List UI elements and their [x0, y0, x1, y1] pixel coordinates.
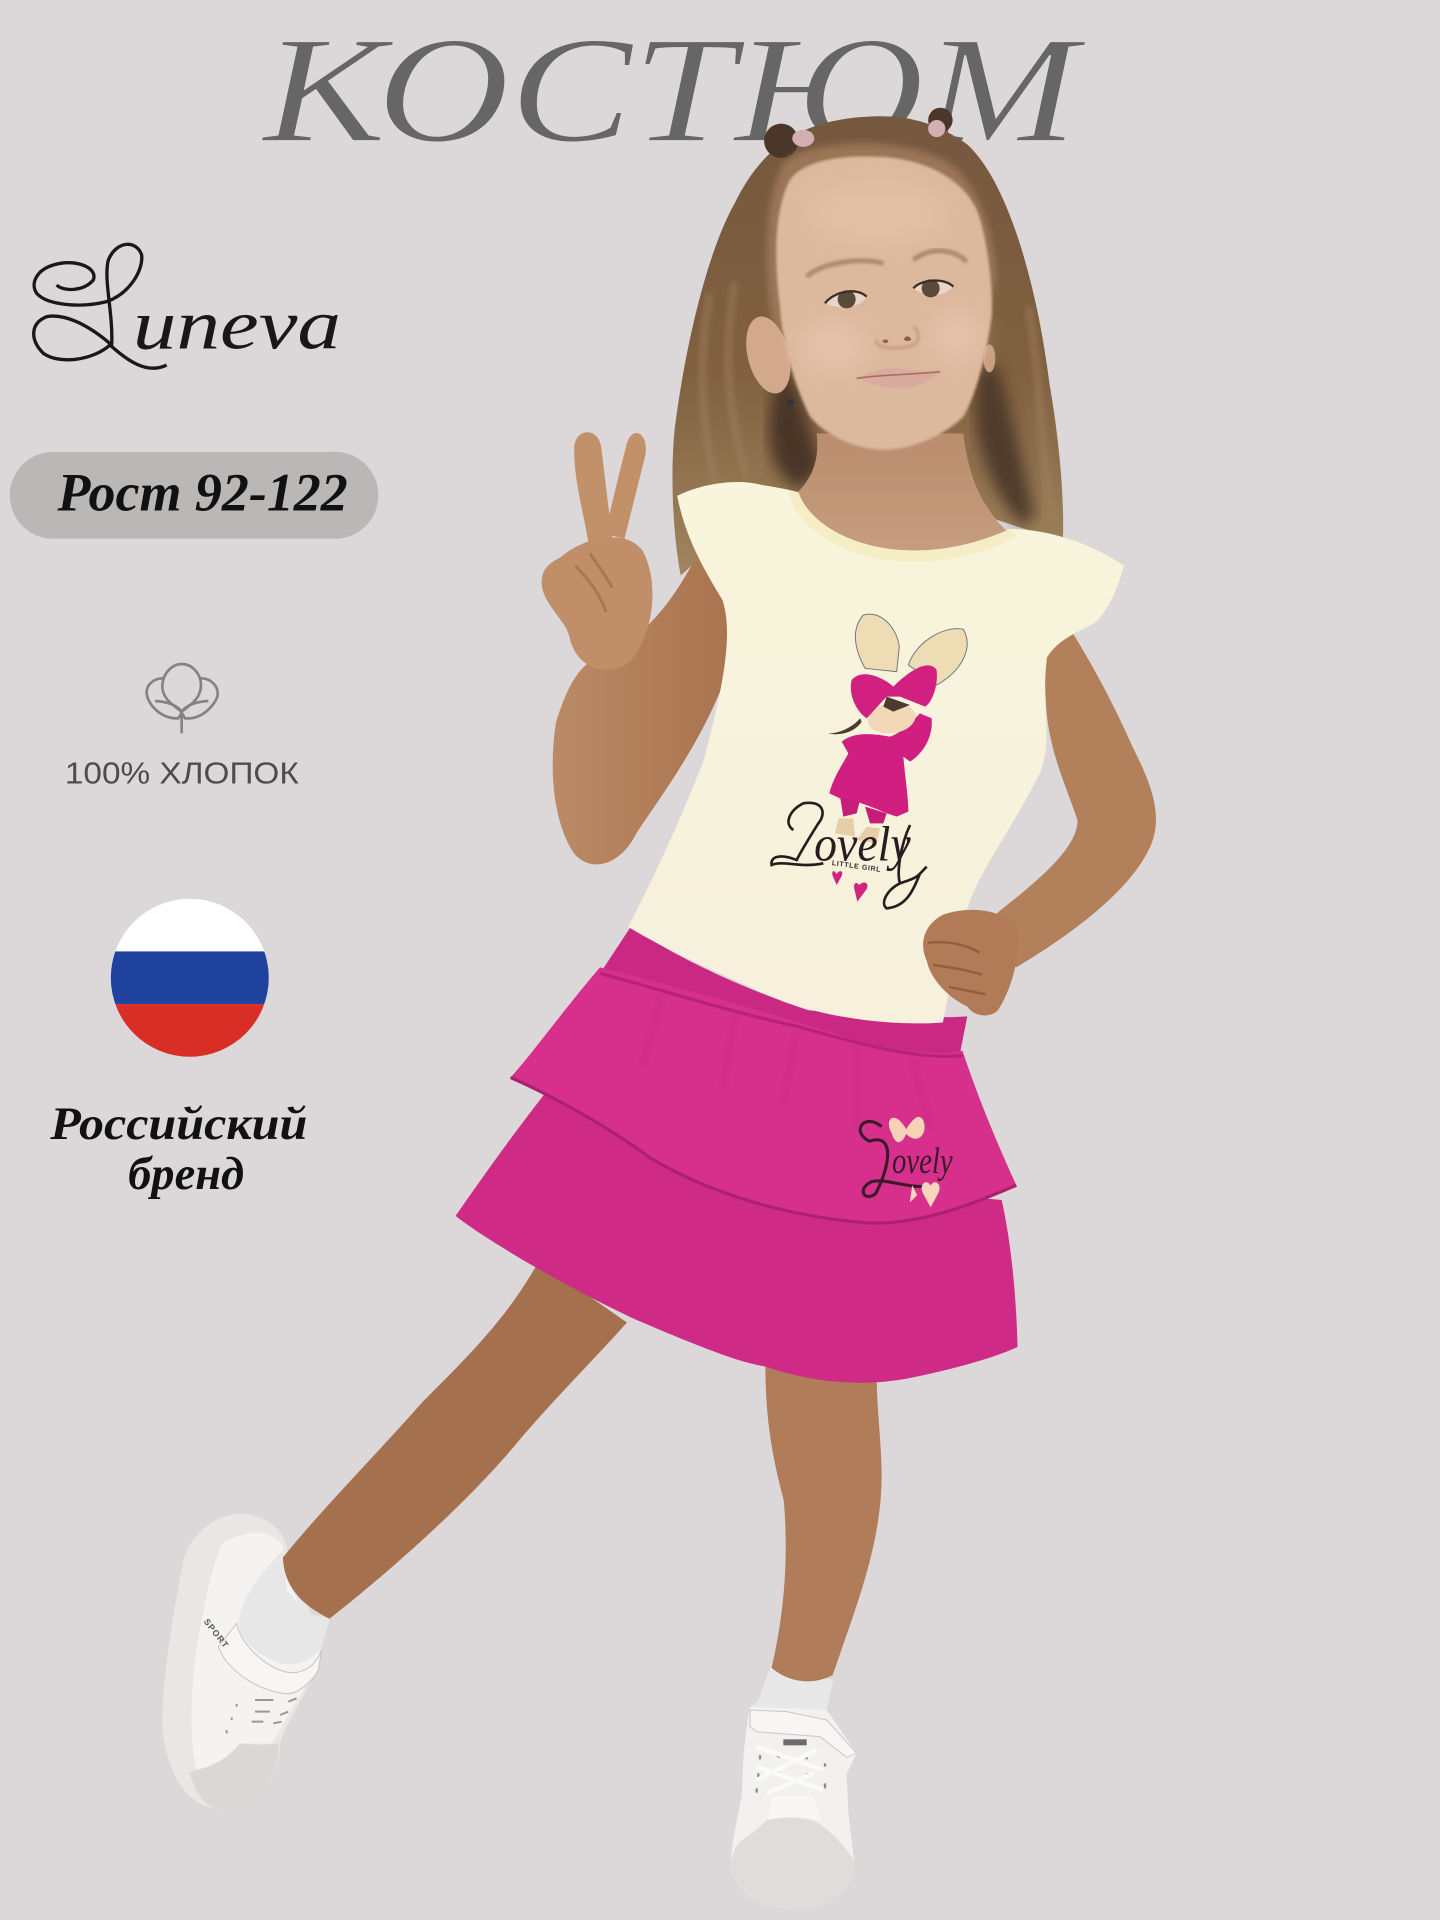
- skirt print: Lovely: [891, 1140, 953, 1181]
- right hand: [923, 910, 1018, 1015]
- brand origin text: бренд: [128, 1149, 244, 1200]
- left arm with hand: [542, 432, 729, 864]
- t-shirt print: lovely lettering: [771, 803, 927, 908]
- left shoe: [162, 1513, 330, 1808]
- infographic canvas: [10, 41, 1156, 1909]
- left leg: [283, 1261, 627, 1619]
- brand origin text: Российский: [49, 1099, 307, 1150]
- skirt print: [860, 1117, 953, 1207]
- brand logo: Luneva: [133, 286, 341, 364]
- height pill: Рост 92-122: [57, 463, 348, 523]
- icon: russian flag: [110, 899, 269, 1058]
- t-shirt print: bunny girl: [828, 614, 967, 843]
- hair buns: [764, 108, 953, 158]
- earrings: [787, 399, 794, 406]
- shoe label: SPORT: [202, 1617, 231, 1650]
- nose: [882, 336, 911, 343]
- right leg: [765, 1359, 882, 1681]
- neck: [797, 433, 1017, 600]
- height pill: [10, 452, 378, 539]
- title: КОСТЮМ: [261, 6, 1087, 174]
- right arm: [980, 606, 1156, 967]
- t-shirt print: lovely lettering: Lovely: [814, 816, 911, 872]
- sock: [238, 1550, 330, 1664]
- lower skirt tier: [456, 1093, 1018, 1383]
- brand origin text: [49, 1099, 307, 1200]
- mouth: [857, 368, 940, 389]
- eyes: [807, 251, 967, 308]
- t-shirt: [628, 482, 1124, 1023]
- right shoe: [731, 1663, 857, 1910]
- girl figure: [162, 108, 1156, 1910]
- strap: [218, 1623, 322, 1694]
- waistband: [600, 927, 967, 1078]
- upper skirt tier: [511, 967, 1016, 1223]
- t-shirt print: lovely lettering: LITTLE GIRL: [831, 860, 882, 874]
- back hair: [672, 116, 1063, 576]
- icon: cotton: [147, 664, 218, 733]
- face: [739, 143, 997, 450]
- brand logo: [34, 244, 341, 368]
- material label: 100% ХЛОПОК: [65, 757, 299, 791]
